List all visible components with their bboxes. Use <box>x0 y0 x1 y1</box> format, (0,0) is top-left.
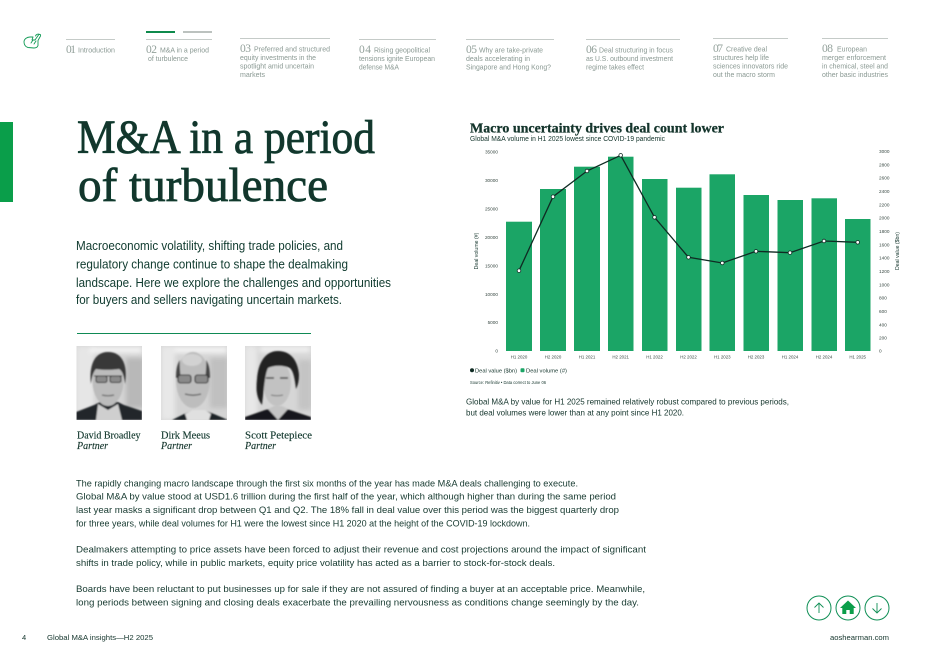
right axis labels: 600 <box>879 309 887 314</box>
chart source: Source: Refinitiv • Data correct to June 06 <box>470 380 547 385</box>
nav item 07 <box>713 38 788 79</box>
green rule <box>77 333 311 334</box>
nav item 07: structures help life <box>713 53 769 62</box>
left axis title: Deal volume (#) <box>474 232 480 269</box>
nav item 03: Preferred and structured <box>254 44 330 54</box>
nav item 08 <box>822 38 888 79</box>
right axis labels: 1200 <box>879 269 890 274</box>
chart caption <box>466 396 789 418</box>
name: Scott Petepiece: Scott Petepiece <box>245 430 313 442</box>
chart title: Macro uncertainty drives deal count lower <box>470 122 724 136</box>
left axis labels: 10000 <box>485 292 498 297</box>
nav item 05: Why are take-private <box>479 46 543 54</box>
x axis labels: H1 2021 <box>579 355 596 360</box>
chart subtitle: Global M&A volume in H1 2025 lowest since COVID-19 pandemic <box>470 134 665 143</box>
x axis labels <box>511 355 867 360</box>
right axis labels: 400 <box>879 322 887 327</box>
button: page up <box>807 596 831 620</box>
nav item 08: other basic industries <box>822 70 888 79</box>
nav item 02 active: M&A in a period <box>160 46 209 54</box>
portrait: David Broadley <box>76 346 144 420</box>
nav item 03: spotlight amid uncertain <box>240 62 314 70</box>
nav item 03: markets <box>240 70 265 79</box>
right axis labels: 2400 <box>879 189 890 194</box>
name: Scott Petepiece: Partner <box>244 441 276 452</box>
portrait: Scott Petepiece <box>245 346 312 420</box>
x axis labels: H1 2020 <box>511 355 528 360</box>
nav item 01: 01 <box>66 44 76 56</box>
right axis labels: 800 <box>879 296 887 301</box>
nav item 05 <box>466 39 554 72</box>
nav item 04: 04 <box>359 44 371 56</box>
intro text: for buyers and sellers navigating uncertain markets. <box>76 292 342 307</box>
x axis labels: H1 2024 <box>782 355 799 360</box>
right axis labels: 1600 <box>879 242 890 247</box>
x axis labels: H2 2021 <box>612 355 630 360</box>
nav item 04: defense M&A <box>359 62 399 72</box>
paragraph 1: for three years, while deal volumes for H1 were the lowest since H1 2020 at the height of the COVID-19 lockdown. <box>76 518 530 530</box>
x axis labels: H2 2023 <box>748 355 765 360</box>
nav item 04 <box>359 39 436 72</box>
chart: deal volume bars and deal value line <box>474 149 901 360</box>
name: David Broadley <box>76 430 140 452</box>
nav item 01: Introduction <box>78 46 115 54</box>
green side marker <box>0 122 13 202</box>
x axis labels: H2 2022 <box>680 355 697 360</box>
footer: page number: 4 <box>22 633 26 642</box>
x axis labels: H1 2023 <box>714 355 731 360</box>
paragraph 1: The rapidly changing macro landscape through the first six months of the year has made M&A deals challenging to execute. <box>76 478 578 490</box>
left axis labels <box>485 150 498 354</box>
chart legend: Deal value ($bn) <box>475 368 517 374</box>
nav item 06: Deal structuring in focus <box>599 46 673 54</box>
icon: hand pointer logo <box>24 34 41 48</box>
button: home <box>836 596 860 620</box>
name: Scott Petepiece <box>244 430 313 452</box>
right axis labels <box>879 149 890 354</box>
nav item 05: Singapore and Hong Kong? <box>466 62 551 72</box>
right axis labels: 0 <box>879 348 882 354</box>
nav item 08: 08 <box>822 43 833 55</box>
right axis labels: 2600 <box>879 176 890 181</box>
nav item 07: sciences innovators ride <box>713 62 788 70</box>
right axis labels: 2000 <box>879 216 890 221</box>
title <box>77 111 375 212</box>
nav item 06: as U.S. outbound investment <box>586 54 674 63</box>
x axis labels: H1 2025 <box>849 355 867 360</box>
body text <box>76 478 646 608</box>
nav item 07: Creative deal <box>726 44 767 54</box>
name: David Broadley: David Broadley <box>77 430 140 442</box>
paragraph 3 <box>76 584 645 608</box>
nav item 02 active <box>146 31 212 63</box>
nav item 06: regime takes effect <box>586 62 645 72</box>
line: deal value <box>517 154 860 273</box>
paragraph 2: shifts in trade policy, while in public markets, equity price volatility has acted as a barrier to stock-for-stock deals. <box>76 558 555 569</box>
paragraph 1: last year masks a significant drop between Q1 and Q2. The 18% fall in deal value over this period was the biggest quarterly drop <box>76 505 619 516</box>
nav item 06 <box>586 39 680 72</box>
paragraph 2: Dealmakers attempting to price assets have been forced to adjust their revenue and cost projections around the impact of significant <box>76 544 646 556</box>
name: David Broadley: Partner <box>76 441 108 452</box>
footer: website: aoshearman.com <box>830 633 889 642</box>
right axis title: Deal value ($bn) <box>895 232 901 270</box>
left axis labels: 5000 <box>488 320 498 325</box>
title: M&A in a period <box>77 111 375 164</box>
nav item 06: 06 <box>586 44 597 56</box>
nav item 02 active: of turbulence <box>148 54 188 63</box>
paragraph 3: Boards have been reluctant to put businesses up for sale if they are not assured of finding a buyer at an acceptable price. Meanwhile, <box>76 584 645 595</box>
right axis labels: 1000 <box>879 282 890 287</box>
left axis labels: 35000 <box>485 150 498 154</box>
nav item 03: equity investments in the <box>240 53 316 62</box>
nav item 05: deals accelerating in <box>466 54 530 63</box>
portrait: Dirk Meeus <box>161 346 228 420</box>
name: Dirk Meeus: Dirk Meeus <box>161 430 210 442</box>
paragraph 2 <box>76 544 646 569</box>
title: of turbulence <box>78 159 328 212</box>
chart caption: Global M&A by value for H1 2025 remained relatively robust compared to previous periods, <box>466 396 789 406</box>
x axis labels: H2 2024 <box>816 355 833 360</box>
nav item 07: 07 <box>713 43 723 55</box>
paragraph 3: long periods between signing and closing deals exacerbate the prevailing nervousness as conditions change seemingly by the day. <box>76 598 639 608</box>
left axis labels: 0 <box>495 348 498 354</box>
nav item 03 <box>240 38 330 79</box>
button: page down <box>865 596 889 620</box>
nav item 01 <box>66 39 115 56</box>
left axis labels: 25000 <box>485 206 498 212</box>
nav item 08: European <box>837 44 867 54</box>
right axis labels: 3000 <box>879 149 890 154</box>
left axis labels: 20000 <box>485 235 498 240</box>
bars: deal volume <box>506 157 870 351</box>
x axis labels: H1 2022 <box>646 355 663 360</box>
right axis labels: 2800 <box>879 162 890 167</box>
intro text: Macroeconomic volatility, shifting trade policies, and <box>76 238 343 253</box>
nav item 08: in chemical, steel and <box>822 62 888 70</box>
navigation: section tabs <box>66 31 888 79</box>
chart legend <box>470 368 567 374</box>
nav item 05: 05 <box>466 44 477 56</box>
name: Dirk Meeus: Partner <box>160 441 192 452</box>
nav item 04: tensions ignite European <box>359 54 435 63</box>
partner names <box>76 430 313 452</box>
name: Dirk Meeus <box>160 430 210 452</box>
left axis labels: 15000 <box>485 264 498 268</box>
x axis labels: H2 2020 <box>545 355 562 360</box>
paragraph 1 <box>76 478 619 530</box>
intro text: landscape. Here we explore the challenges and opportunities <box>76 275 391 290</box>
nav item 07: out the macro storm <box>713 70 775 79</box>
chart legend: Deal volume (#) <box>526 368 567 374</box>
right axis labels: 2200 <box>879 202 890 207</box>
right axis labels: 1400 <box>879 256 890 261</box>
nav item 04: Rising geopolitical <box>374 46 430 54</box>
footer: publication name: Global M&A insights—H2 2025 <box>47 633 153 642</box>
right axis labels: 1800 <box>879 229 890 234</box>
left axis labels: 30000 <box>485 178 498 183</box>
nav item 08: merger enforcement <box>822 53 887 62</box>
right axis labels: 200 <box>879 336 887 341</box>
nav item 03: 03 <box>240 43 251 55</box>
chart caption: but deal volumes were lower than at any point since H1 2020. <box>466 408 684 418</box>
intro text <box>76 238 391 307</box>
intro text: regulatory change continue to shape the dealmaking <box>76 256 348 272</box>
paragraph 1: Global M&A by value stood at USD1.6 trillion during the first half of the year, which although higher than during the same period <box>76 492 616 502</box>
nav item 02 active: 02 <box>146 44 157 56</box>
